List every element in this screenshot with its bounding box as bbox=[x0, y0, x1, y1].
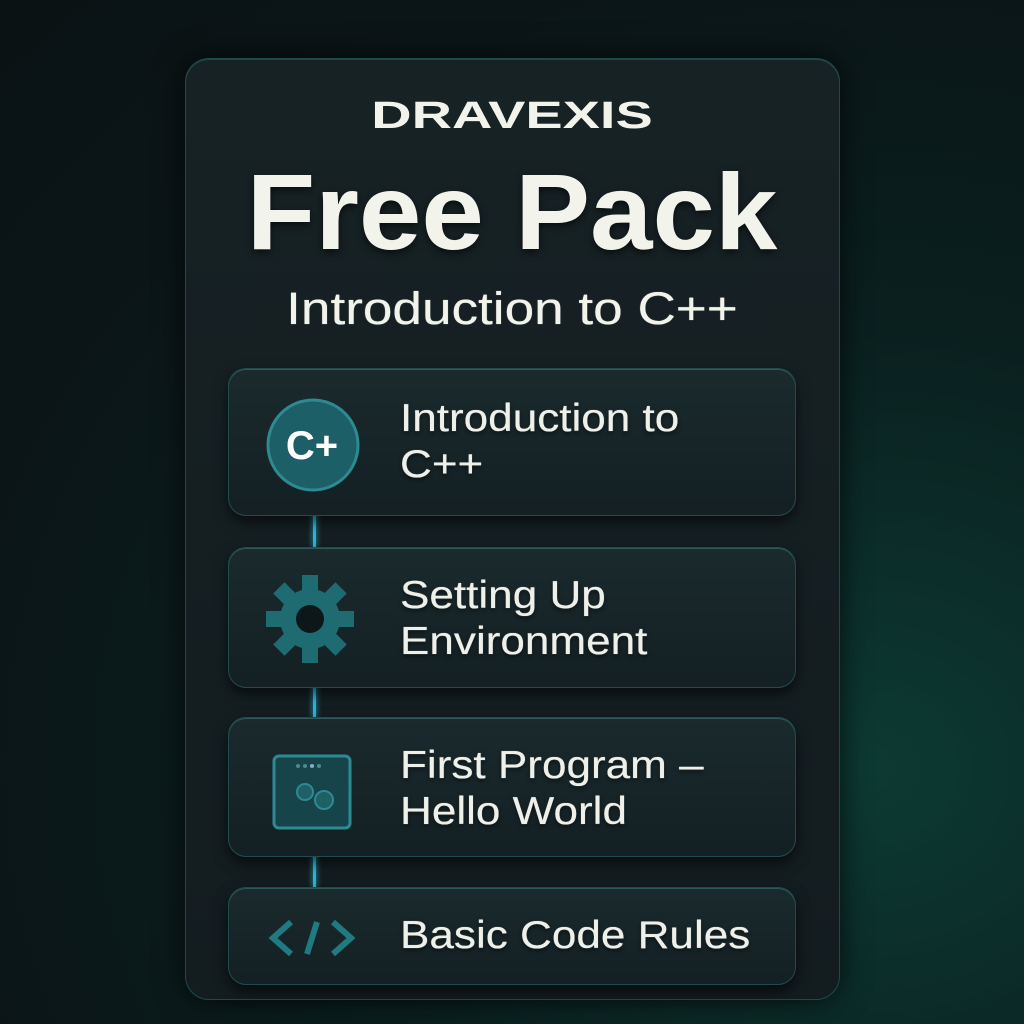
icon: program window bbox=[272, 754, 352, 830]
heading: Free Pack: Free Pack bbox=[247, 151, 777, 272]
panel: step 1 bbox=[228, 368, 796, 516]
icon: gear bbox=[266, 575, 354, 663]
icon: C+ circle bbox=[266, 398, 360, 492]
panel: step 2 bbox=[228, 547, 796, 688]
text: step 2 label bbox=[400, 574, 648, 663]
text: step 3 label: First Program – bbox=[400, 744, 704, 787]
text: step 3 label bbox=[400, 744, 704, 833]
panel: step 3 bbox=[228, 717, 796, 857]
icon: code brackets bbox=[268, 920, 356, 956]
brand title: DRAVEXIS bbox=[371, 95, 653, 137]
text: step 2 label: Setting Up bbox=[400, 574, 606, 617]
text: step 2 label: Environment bbox=[400, 620, 647, 663]
subtitle: Introduction to C++ bbox=[286, 283, 738, 334]
icon: C+ circle: C+ bbox=[286, 424, 338, 468]
text: step 3 label: Hello World bbox=[400, 790, 627, 833]
text: step 1 label bbox=[400, 397, 679, 486]
main card bbox=[185, 58, 840, 1000]
text: step 4 label: Basic Code Rules bbox=[400, 914, 750, 957]
panel: step 4 bbox=[228, 887, 796, 985]
text: step 1 label: C++ bbox=[400, 443, 483, 486]
text: step 1 label: Introduction to bbox=[400, 397, 679, 440]
